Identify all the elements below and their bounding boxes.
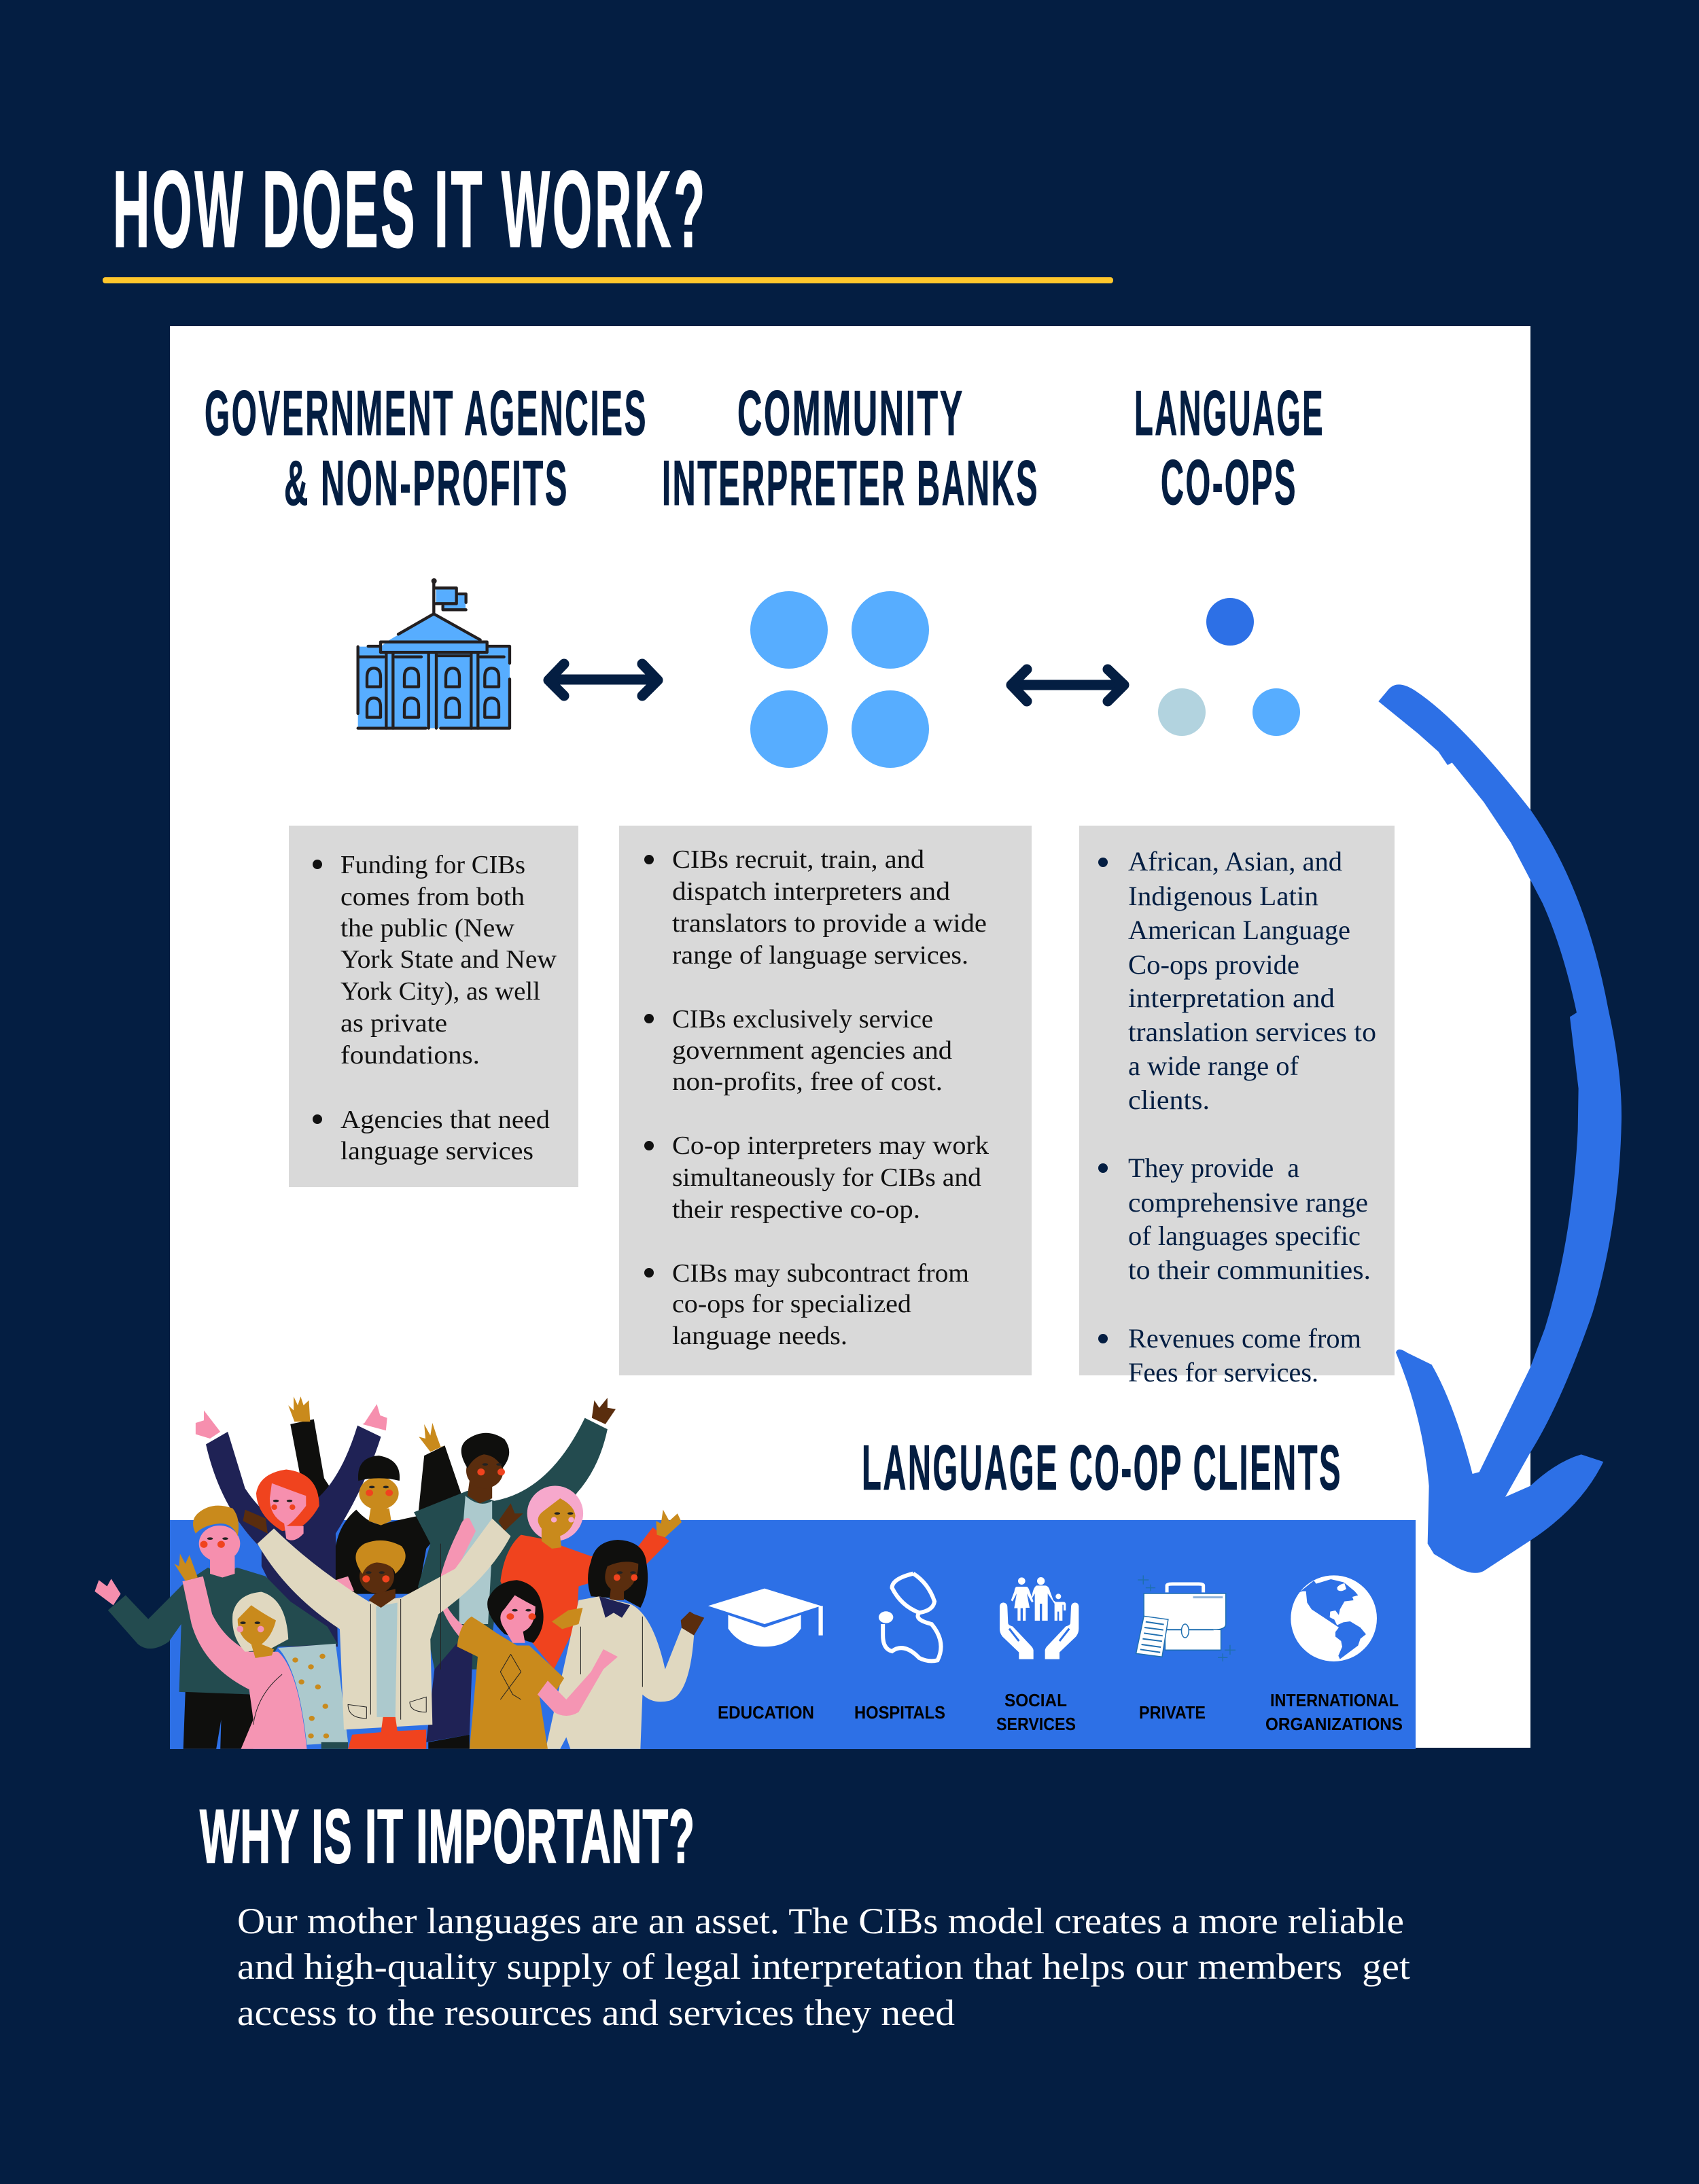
text: CIBs bullets: range of language services. (672, 941, 968, 970)
label: social services: SOCIAL (1004, 1690, 1067, 1710)
text: co-ops bullets: of languages specific (1128, 1220, 1361, 1251)
text: why paragraph: access to the resources and services they need (237, 1992, 955, 2033)
panel: funding grey box (289, 826, 578, 1187)
text: CIBs bullets: their respective co-op. (672, 1195, 920, 1224)
text: CIBs bullets: co-ops for specialized (672, 1290, 911, 1318)
arrow: government to CIBs (548, 664, 658, 696)
heading: community interpreter banks (662, 377, 1039, 518)
text: funding bullets: language services (340, 1137, 533, 1165)
text: co-ops bullets: interpretation and (1128, 983, 1335, 1013)
label: social services (996, 1690, 1076, 1734)
text: CIBs bullets: language needs. (672, 1322, 847, 1350)
icon: government building (358, 578, 510, 728)
icon: four CIB circles (750, 591, 929, 768)
text: CIBs bullets: simultaneously for CIBs and (672, 1163, 981, 1192)
icon: briefcase and document (1136, 1575, 1236, 1661)
text: co-ops bullets: Co-ops provide (1128, 949, 1299, 980)
text: why paragraph: and high-quality supply of legal interpretation that helps our members get (237, 1946, 1410, 1987)
label: social services: SERVICES (996, 1714, 1076, 1734)
text: co-ops bullets: to their communities. (1128, 1254, 1371, 1285)
text: CIBs bullets: CIBs recruit, train, and (672, 845, 924, 874)
text: CIBs bullets: government agencies and (672, 1036, 952, 1065)
text: funding bullets: Agencies that need (340, 1106, 550, 1134)
text: funding bullets: York City), as well (340, 977, 540, 1006)
text: CIBs bullets: Co-op interpreters may work (672, 1131, 989, 1160)
text: HOW DOES IT WORK? (113, 148, 707, 270)
heading: why is it important: WHY IS IT IMPORTANT? (200, 1794, 695, 1879)
arrow: large curved blue arrow (1378, 684, 1622, 1573)
icon: stethoscope (879, 1574, 941, 1661)
text: funding bullets: as private (340, 1009, 447, 1038)
text: co-ops bullets: They provide a (1128, 1152, 1299, 1183)
text: co-ops bullets: translation services to (1128, 1017, 1376, 1047)
text: CIBs bullets (644, 845, 989, 1350)
heading: government agencies and non-profits: & NON-PROFITS (284, 447, 569, 518)
heading: community interpreter banks: INTERPRETER BANKS (662, 447, 1039, 518)
text: co-ops bullets: African, Asian, and (1128, 846, 1342, 877)
heading: community interpreter banks: COMMUNITY (737, 377, 964, 448)
text: CIBs bullets: non-profits, free of cost. (672, 1068, 943, 1096)
text: funding bullets: Funding for CIBs (340, 851, 525, 879)
icon: three co-op circles (1158, 598, 1300, 736)
text: funding bullets: comes from both (340, 883, 525, 911)
text: LANGUAGE (1134, 377, 1325, 448)
heading: government agencies and non-profits (205, 377, 648, 518)
text: co-ops bullets (1098, 846, 1376, 1388)
text: funding bullets: York State and New (340, 945, 557, 974)
icon: globe (1286, 1575, 1377, 1661)
text: co-ops bullets: clients. (1128, 1085, 1210, 1115)
icon: family in hands (1000, 1577, 1079, 1659)
text: CIBs bullets: CIBs may subcontract from (672, 1259, 969, 1288)
text: funding bullets: foundations. (340, 1041, 480, 1070)
label: private: PRIVATE (1139, 1702, 1206, 1723)
text: funding bullets: the public (New (340, 914, 515, 943)
panel: blue clients band (170, 1520, 1416, 1749)
arrow: CIBs to co-ops (1011, 669, 1124, 701)
panel: CIBs grey box (619, 826, 1032, 1375)
heading: language co-ops: CO-OPS (1161, 446, 1297, 518)
heading: government agencies and non-profits: GOVERNMENT AGENCIES (205, 377, 648, 448)
text: co-ops bullets: American Language (1128, 915, 1350, 945)
illustration: group of waving people (94, 1396, 704, 1749)
icon: graduation cap (708, 1589, 823, 1646)
text: CIBs bullets: CIBs exclusively service (672, 1005, 933, 1034)
text: CIBs bullets: dispatch interpreters and (672, 877, 950, 906)
text: co-ops bullets: Revenues come from (1128, 1323, 1361, 1354)
label: international organizations: ORGANIZATIONS (1265, 1714, 1403, 1734)
label: education: EDUCATION (718, 1702, 814, 1723)
heading: language co-ops (1134, 377, 1325, 518)
text: co-ops bullets: Fees for services. (1128, 1357, 1318, 1388)
text: funding bullets (313, 851, 557, 1165)
label: hospitals: HOSPITALS (854, 1702, 945, 1723)
text: why paragraph (237, 1901, 1410, 2033)
text: CIBs bullets: translators to provide a wide (672, 909, 987, 938)
text: why paragraph: Our mother languages are an asset. The CIBs model creates a more reliable (237, 1901, 1404, 1941)
label: international organizations (1265, 1690, 1403, 1734)
panel: co-ops grey box (1079, 826, 1395, 1375)
text: co-ops bullets: a wide range of (1128, 1051, 1299, 1081)
title underline (103, 277, 1113, 283)
text: co-ops bullets: comprehensive range (1128, 1187, 1368, 1218)
panel: white card (170, 326, 1530, 1748)
label: international organizations: INTERNATIONAL (1270, 1690, 1399, 1710)
text: co-ops bullets: Indigenous Latin (1128, 881, 1318, 911)
